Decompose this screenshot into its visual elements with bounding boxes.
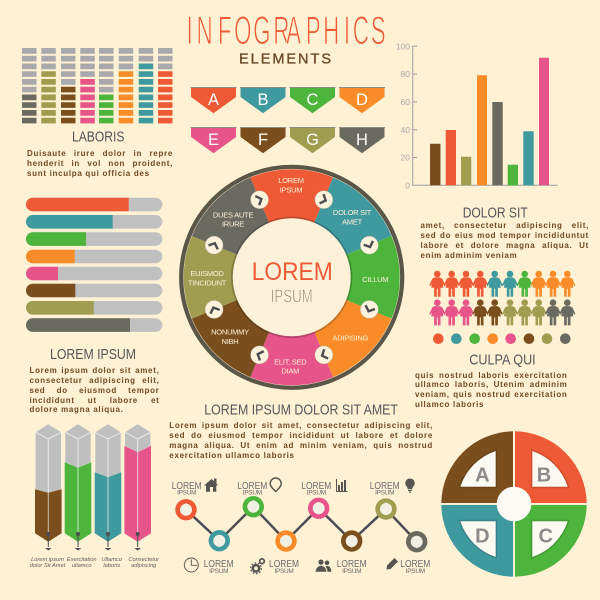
heading: lorem ipsum dolor sit amet: LOREM IPSUM DOLOR SIT AMET bbox=[204, 401, 398, 418]
equalizer chart bbox=[22, 48, 172, 123]
ribbon labels: F bbox=[258, 131, 268, 149]
people pictogram bbox=[429, 271, 575, 325]
ribbon labels: A bbox=[208, 91, 219, 109]
bar chart bbox=[396, 41, 558, 190]
timeline: IPSUM bbox=[375, 490, 394, 497]
title: INFOGRAPHICS bbox=[186, 8, 386, 53]
text block: culpa qui: veniam, quis nostrud exercitation bbox=[415, 390, 568, 399]
timeline: LOREM bbox=[172, 480, 202, 492]
text block: dolor sit: enim adminim veniam bbox=[420, 251, 517, 260]
icon: home bbox=[204, 478, 218, 492]
quarter circle diagram: A bbox=[475, 465, 490, 487]
timeline: IPSUM bbox=[274, 568, 294, 575]
icon: light bulb bbox=[405, 478, 415, 493]
text block: lorem ipsum bbox=[30, 366, 160, 414]
ribbon labels: H bbox=[356, 131, 368, 149]
text block: lorem ipsum dolor sit amet: Lorem ipsum dolor sit amet, consectetur adipiscing elit, bbox=[169, 421, 433, 430]
wheel diagram: IPSUM bbox=[271, 286, 313, 307]
text block: dolor sit: sed do eius mod tempor incididuntut bbox=[420, 231, 589, 240]
text block: dolor sit: labore et dolore magna aliqua. Ut bbox=[420, 241, 589, 250]
timeline: LOREM bbox=[400, 558, 430, 570]
wheel diagram: IPSUM bbox=[280, 185, 302, 194]
text block: lorem ipsum dolor sit amet: magna aliqua. Ut enim ad minim veniam, quis nostrud bbox=[169, 441, 433, 450]
bar chart: 0 bbox=[405, 180, 410, 190]
icon: clock bbox=[184, 558, 198, 572]
subtitle: ELEMENTS bbox=[239, 51, 331, 67]
wheel diagram: DIAM bbox=[281, 366, 299, 375]
timeline bbox=[172, 480, 430, 575]
timeline: IPSUM bbox=[342, 568, 361, 575]
heading: dolor sit: DOLOR SIT bbox=[463, 204, 528, 222]
heading: lorem ipsum: LOREM IPSUM bbox=[50, 346, 136, 363]
pencil chart: Exercitation bbox=[67, 557, 97, 563]
text block: lorem ipsum: sed do eiusmod tempor bbox=[30, 386, 160, 395]
text block: laboris: henderit in vol non proident, bbox=[27, 159, 173, 168]
timeline: LOREM bbox=[237, 480, 267, 492]
wheel diagram: LOREM bbox=[252, 259, 333, 286]
icon: people bbox=[316, 560, 331, 572]
timeline: LOREM bbox=[204, 558, 234, 570]
wheel diagram: CILLUM bbox=[362, 275, 388, 284]
text block: lorem ipsum: consectetur adipiscing elit, bbox=[30, 376, 160, 385]
bar chart: 100 bbox=[396, 41, 410, 51]
quarter circle diagram: C bbox=[538, 526, 553, 548]
bar chart: 80 bbox=[401, 69, 410, 79]
timeline: IPSUM bbox=[177, 490, 196, 497]
timeline: IPSUM bbox=[307, 490, 326, 497]
wheel diagram: EUISMOD bbox=[190, 269, 224, 278]
pencil chart: Ullamco bbox=[101, 557, 122, 563]
timeline: LOREM bbox=[301, 480, 331, 492]
wheel diagram: ELIT, SED bbox=[274, 357, 307, 366]
text block: laboris bbox=[27, 149, 173, 178]
timeline: LOREM bbox=[337, 558, 367, 570]
wheel diagram: LOREM bbox=[278, 176, 304, 185]
pencil chart: Consectetur bbox=[128, 557, 160, 563]
pencil chart: adipiscing bbox=[131, 563, 157, 569]
text block: culpa qui bbox=[415, 370, 568, 409]
icon: map pin bbox=[270, 478, 281, 492]
progress bars bbox=[26, 198, 162, 332]
bar chart: 40 bbox=[401, 125, 410, 135]
wheel diagram: IRURE bbox=[222, 220, 244, 229]
text block: lorem ipsum: incididunt ut labore et bbox=[30, 396, 160, 405]
pencil chart: laboris bbox=[103, 563, 120, 569]
ribbon labels bbox=[190, 87, 385, 153]
timeline: IPSUM bbox=[406, 568, 425, 575]
wheel diagram: AMET bbox=[342, 217, 363, 226]
quarter circle diagram: D bbox=[475, 525, 490, 547]
quarter circle diagram: B bbox=[537, 465, 551, 487]
text block: lorem ipsum dolor sit amet: exercitation ullamco laboris bbox=[169, 451, 295, 460]
icon: pencil bbox=[386, 558, 398, 570]
pencil chart: dolor Sit Amet bbox=[30, 563, 66, 569]
ribbon labels: E bbox=[208, 131, 219, 149]
text block: laboris: Duisaute irure dolor in repre bbox=[27, 149, 173, 158]
text block: culpa qui: quis nostrud laboris exercitation bbox=[415, 370, 568, 380]
colour dots legend bbox=[433, 333, 571, 344]
pencil chart bbox=[30, 424, 160, 569]
wheel diagram: NIBH bbox=[222, 337, 238, 346]
wheel diagram: NONUMMY bbox=[211, 328, 249, 337]
timeline: LOREM bbox=[370, 480, 400, 492]
bar chart: 60 bbox=[401, 97, 410, 107]
wheel diagram: DOLOR SIT bbox=[333, 208, 372, 217]
ribbon labels: G bbox=[306, 131, 319, 149]
wheel diagram: TINCIDUNT bbox=[188, 278, 227, 287]
text block: lorem ipsum: dolore magna aliqua. bbox=[30, 405, 124, 414]
text block: lorem ipsum dolor sit amet bbox=[169, 421, 433, 460]
icon: bar chart bbox=[336, 479, 348, 492]
wheel diagram bbox=[181, 167, 402, 388]
pencil chart: Lorem ipsum bbox=[31, 557, 64, 563]
wheel diagram: DUES AUTE bbox=[213, 210, 253, 219]
heading: culpa qui: CULPA QUI bbox=[469, 352, 536, 368]
ribbon labels: D bbox=[356, 91, 368, 109]
text block: lorem ipsum dolor sit amet: sed do eiusmod tempor incididunt ut labore et dolore bbox=[169, 431, 433, 440]
wheel diagram: ADIPISING bbox=[332, 333, 369, 342]
bar chart: 20 bbox=[401, 152, 410, 162]
timeline: IPSUM bbox=[243, 490, 262, 497]
timeline: LOREM bbox=[269, 558, 299, 570]
text block: culpa qui: ullamco laboris bbox=[415, 400, 484, 409]
quarter circle diagram bbox=[441, 431, 587, 577]
icon: gears bbox=[251, 559, 264, 574]
text block: dolor sit bbox=[420, 221, 589, 260]
text block: dolor sit: amet, consectetur adipiscing elit, bbox=[420, 221, 589, 230]
timeline: IPSUM bbox=[209, 568, 228, 575]
ribbon labels: C bbox=[307, 91, 319, 109]
ribbon labels: B bbox=[257, 91, 269, 109]
heading: laboris: LABORIS bbox=[72, 129, 124, 146]
text block: lorem ipsum: Lorem ipsum dolor sit amet, bbox=[30, 366, 160, 375]
pencil chart: ullamco bbox=[72, 563, 92, 569]
text block: culpa qui: ullamco laboris, Utenim adminim bbox=[415, 380, 568, 389]
text block: laboris: sunt inculpa qui officia des bbox=[27, 169, 150, 178]
